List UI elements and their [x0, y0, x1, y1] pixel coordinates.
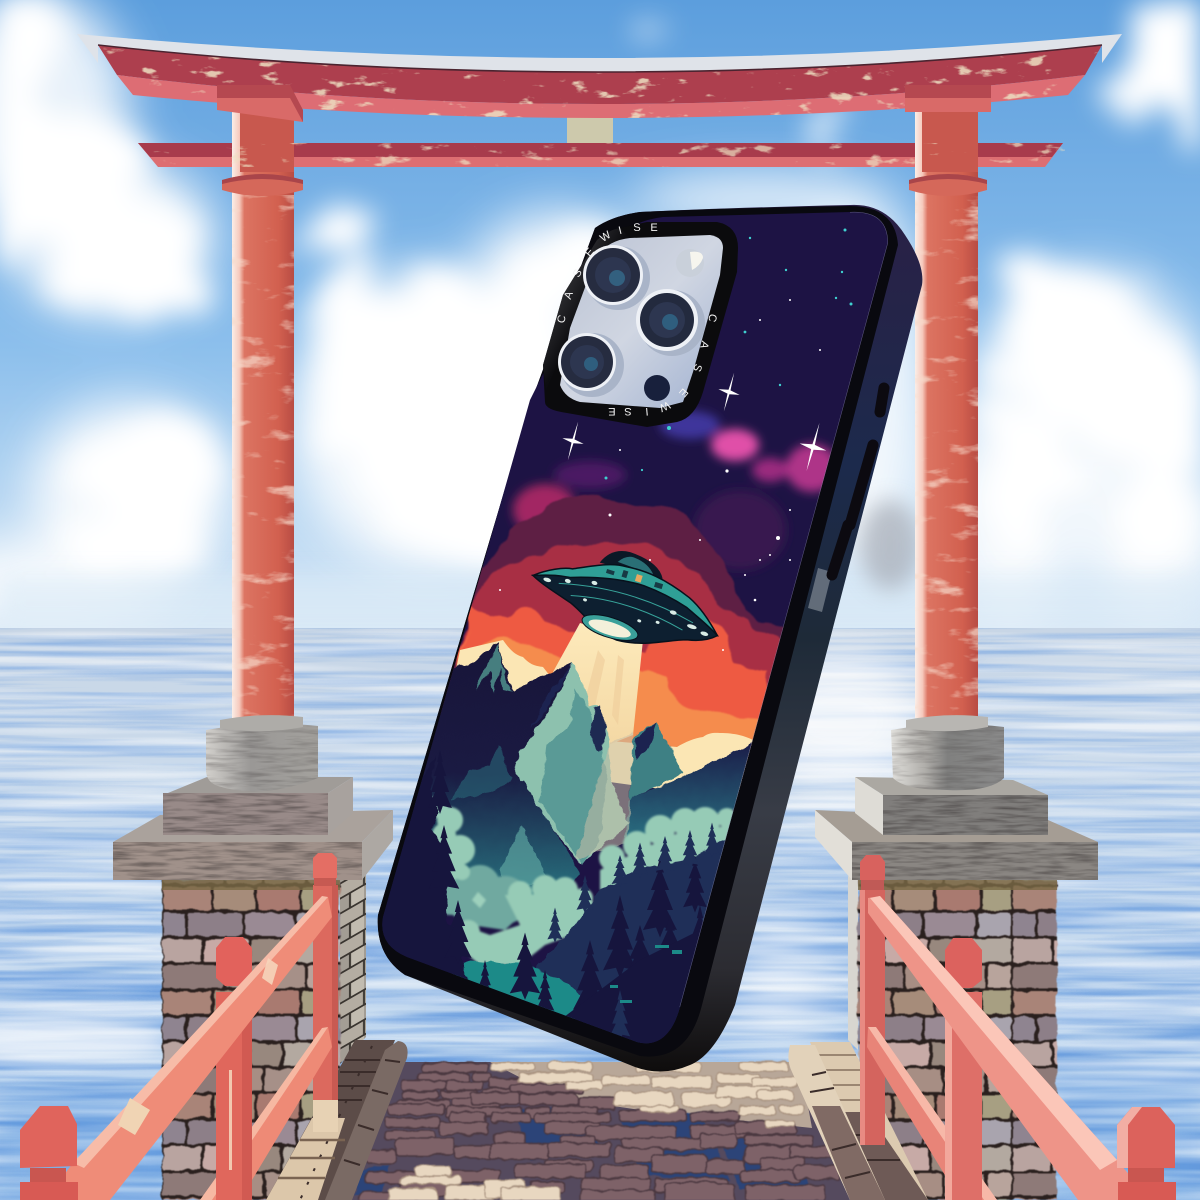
- brand ring text: E: [608, 405, 616, 417]
- sea: [0, 628, 1200, 1200]
- case print artwork: [365, 200, 900, 1060]
- sensor: [644, 375, 670, 401]
- sunlit flagstones: [388, 1062, 804, 1200]
- haze layers: [440, 497, 800, 790]
- right railing: [860, 855, 1176, 1200]
- brand ring text: A: [697, 340, 711, 351]
- brand ring text: E: [583, 246, 597, 259]
- horizon haze: [0, 575, 1200, 630]
- lens 3: [558, 333, 624, 397]
- brand ring text: W: [598, 229, 614, 245]
- brand ring text: C: [555, 314, 569, 325]
- sky background: [0, 0, 1200, 630]
- brand ring text: C: [705, 312, 719, 323]
- step: [163, 777, 353, 835]
- stone bridge floor: [266, 1040, 928, 1200]
- lens 2: [636, 289, 705, 356]
- right ridge: [625, 742, 753, 845]
- right pillar: [909, 100, 987, 718]
- brand ring text: I: [645, 405, 649, 417]
- front dark mountain: [464, 780, 580, 896]
- brick pier left: [162, 875, 366, 1200]
- camera island: [543, 222, 738, 427]
- phone with case: [365, 200, 922, 1072]
- brand ring text: E: [676, 386, 690, 399]
- middle post: [216, 937, 252, 1200]
- silver camera plate: [560, 235, 723, 408]
- right curb: [788, 1042, 928, 1200]
- cloud shadow behind phone: [860, 500, 920, 590]
- left railing: [20, 853, 338, 1200]
- lower beam: [138, 143, 1065, 167]
- brick pier right: [848, 876, 1057, 1200]
- pillar caps: [217, 85, 991, 122]
- brand ring text: S: [571, 267, 585, 280]
- brand ring text: [555, 222, 719, 417]
- slab: [113, 810, 393, 880]
- teal clouds: [426, 796, 737, 965]
- lower rail right: [867, 1027, 997, 1200]
- left curb: [266, 1040, 408, 1200]
- centre mountain: [513, 662, 633, 865]
- far post: [313, 853, 338, 1132]
- near tree tops on clouds: [547, 822, 720, 1041]
- upper rail right: [868, 896, 1150, 1200]
- lens 1: [583, 245, 650, 310]
- left stone base: [113, 715, 393, 1200]
- side buttons: [832, 388, 884, 575]
- far post right: [860, 855, 885, 1145]
- UFO: [531, 551, 719, 644]
- far left mountain: [414, 642, 588, 832]
- centre post: [567, 106, 613, 144]
- teal speckles in forest: [610, 945, 682, 1003]
- print edge highlight: [680, 212, 888, 1007]
- case body: [378, 205, 922, 1072]
- left pillar: [222, 100, 303, 718]
- cylinder right: [891, 724, 1004, 790]
- stars: [499, 299, 851, 651]
- ring: [220, 715, 303, 731]
- brand ring text: I: [617, 225, 623, 237]
- near post: [20, 1106, 78, 1200]
- clouds: [0, 0, 1200, 620]
- lower rail: [200, 1027, 332, 1200]
- step right: [855, 777, 1048, 835]
- right stone base: [815, 715, 1098, 1200]
- top beam: [77, 34, 1122, 118]
- brand ring text: E: [650, 222, 658, 234]
- forest silhouettes: [382, 776, 706, 1043]
- ring right: [906, 715, 988, 731]
- brand ring text: A: [562, 289, 576, 301]
- sunlit floor patch: [490, 1062, 812, 1128]
- mid forest: [520, 835, 730, 1050]
- near post right: [1117, 1107, 1176, 1200]
- flash: [676, 249, 704, 277]
- brand ring text: W: [657, 398, 672, 414]
- teal valley: [447, 960, 585, 1020]
- upper rail: [60, 896, 332, 1200]
- case side glare: [808, 568, 832, 612]
- floor base: [345, 1062, 850, 1200]
- brand ring text: S: [633, 222, 641, 234]
- right peak: [630, 723, 683, 800]
- case bezel: [378, 206, 898, 1057]
- middle post right: [945, 938, 982, 1200]
- torii gate: [77, 34, 1122, 718]
- brand ring text: S: [690, 362, 704, 373]
- water puddles: [355, 1108, 810, 1195]
- slab right: [815, 810, 1098, 880]
- shaded flagstones: [360, 1063, 840, 1200]
- UFO light beam: [553, 623, 643, 745]
- brand ring text: S: [624, 405, 632, 417]
- cream sky: [450, 640, 753, 800]
- cylinder: [206, 724, 318, 791]
- nebula: [513, 411, 838, 570]
